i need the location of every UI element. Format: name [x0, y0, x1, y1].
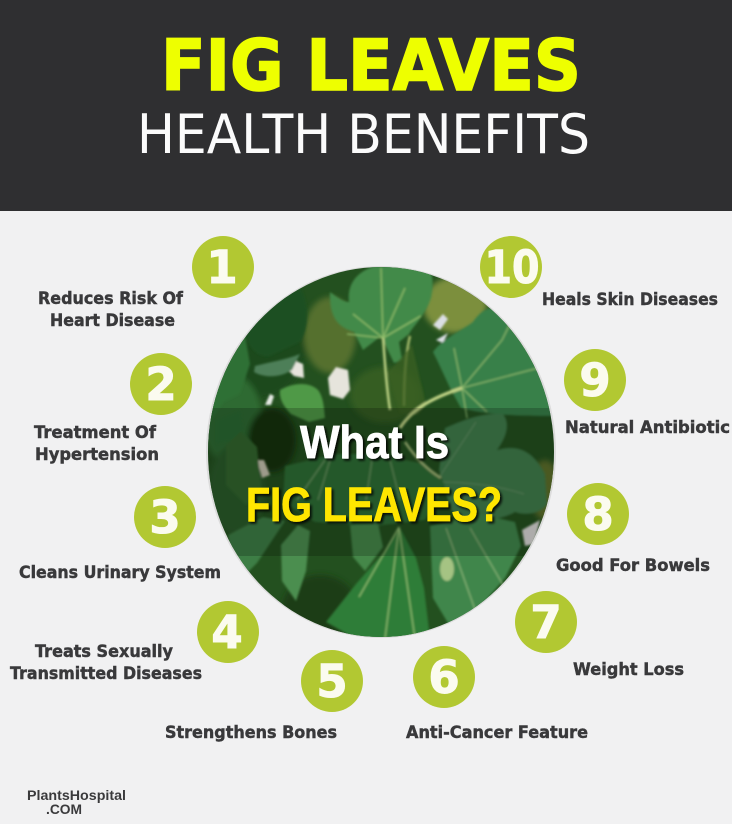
subtitle: HEALTH BENEFITS: HEALTH BENEFITS: [137, 103, 590, 166]
item 8: badge and label: 8: [582, 488, 614, 541]
lower right leaf: [430, 514, 521, 628]
item 3: badge and label: Cleans Urinary System: [19, 563, 221, 582]
item 1: badge and label: [38, 236, 254, 330]
item 10: badge and label: [480, 236, 718, 309]
item 6: badge and label: Anti-Cancer Feature: [406, 723, 588, 742]
dark-left foliage: [246, 288, 308, 341]
item 1: badge and label: Reduces Risk Of: [38, 289, 184, 308]
item 7: badge and label: 7: [530, 596, 562, 649]
item 4: badge and label: Transmitted Diseases: [10, 664, 202, 683]
item 2: badge and label: 2: [145, 358, 177, 411]
right leaf: [433, 308, 553, 416]
light gaps: [288, 361, 350, 399]
item 10: badge and label: 10: [484, 241, 540, 294]
item 6: badge and label: [406, 646, 588, 742]
item 7: badge and label: Weight Loss: [573, 660, 684, 679]
watermark: PlantsHospital.COM: .COM: [46, 802, 82, 817]
item 5: badge and label: 5: [316, 655, 348, 708]
center leaves: [283, 454, 445, 526]
item 4: badge and label: [10, 601, 259, 683]
photo text: What Is: What Is: [300, 416, 449, 468]
item 3: badge and label: 3: [149, 491, 181, 544]
item 7: badge and label: [515, 591, 684, 679]
item 1: badge and label: 1: [206, 241, 238, 294]
dark text band: [200, 408, 565, 556]
item 9: badge and label: 9: [579, 354, 611, 407]
item 10: badge and label: Heals Skin Diseases: [542, 290, 718, 309]
central photo circle: fig leaves: [206, 266, 556, 638]
item 9: badge and label: Natural Antibiotic: [565, 418, 730, 437]
watermark: PlantsHospital.COM: [27, 788, 126, 817]
item 5: badge and label: [165, 650, 363, 742]
top leaf: [330, 266, 433, 363]
watermark: PlantsHospital.COM: PlantsHospital: [27, 788, 126, 803]
item 5: badge and label: Strengthens Bones: [165, 723, 337, 742]
item 6: badge and label: 6: [428, 651, 460, 704]
middle right leaves: [439, 414, 547, 520]
photo text: FIG LEAVES?: FIG LEAVES?: [246, 479, 502, 532]
item 8: badge and label: Good For Bowels: [556, 556, 710, 575]
item 2: badge and label: Treatment Of: [34, 423, 157, 442]
item 4: badge and label: 4: [211, 606, 243, 659]
header band: [0, 0, 732, 211]
item 8: badge and label: [556, 483, 710, 575]
item 2: badge and label: Hypertension: [35, 445, 159, 464]
item 2: badge and label: [34, 353, 192, 464]
item 9: badge and label: [564, 349, 730, 437]
title: FIG LEAVES: FIG LEAVES: [161, 25, 581, 107]
item 3: badge and label: [19, 486, 221, 582]
item 1: badge and label: Heart Disease: [50, 311, 175, 330]
bottom centre leaf: [326, 529, 430, 637]
item 4: badge and label: Treats Sexually: [35, 642, 173, 661]
